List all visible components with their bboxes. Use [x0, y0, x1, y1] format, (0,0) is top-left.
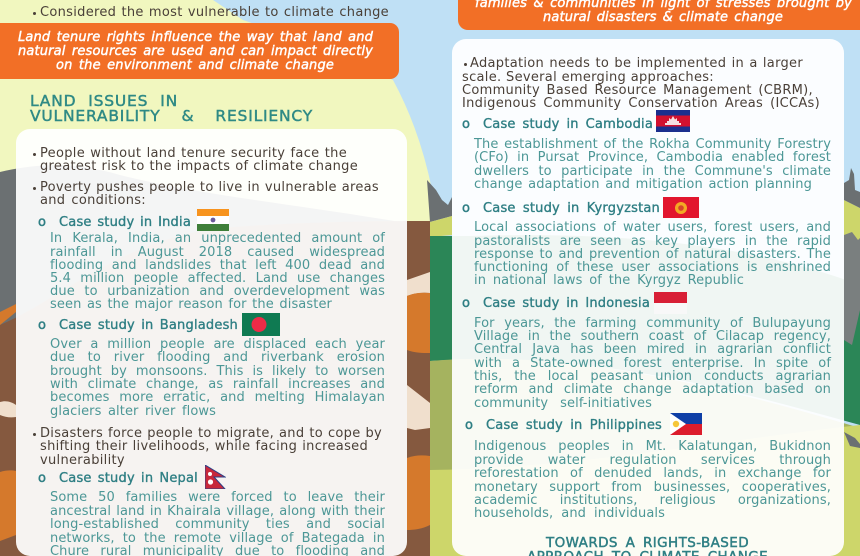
case study: Philippines: provide water regulation services through [474, 453, 831, 468]
icon: Cambodia flag [656, 110, 690, 132]
bullet: disasters [33, 426, 382, 468]
callout: families and communities: natural disasters & climate change [543, 10, 783, 25]
case study: Indonesia: this, the local peasant union conducts agrarian [474, 369, 831, 384]
case study: Bangladesh: due to river flooding and riverbank erosion [50, 350, 385, 365]
case study: Bangladesh: becomes more erratic, and melting Himalayan [50, 390, 385, 405]
case study: Philippines: academic institutions, religious organizations, [474, 493, 831, 508]
case study: Nepal: long-established community ties and social [50, 517, 385, 532]
case study: Philippines: households, and individuals [474, 506, 665, 521]
bullet: adaptation approaches: Indigenous Community Conservation Areas (ICCAs) [462, 96, 820, 111]
heading: towards a rights-based approach [527, 535, 768, 556]
case study: Nepal [38, 465, 385, 556]
case study: India: seen as the major reason for the disaster [50, 297, 332, 312]
callout: land tenure rights [0, 23, 399, 79]
case study: Kyrgyzstan: pastoralists are seen as key players in the rapid [474, 234, 831, 249]
case study: Indonesia: For years, the farming community of Bulupayung [474, 316, 831, 331]
case study: Bangladesh: o [38, 318, 46, 333]
panel: land issues card [16, 129, 407, 556]
case study: Philippines: o [465, 418, 473, 433]
case study: Bangladesh: brought by monsoons. This is likely to worsen [50, 364, 385, 379]
case study: India: o [38, 215, 46, 230]
heading: land issues [30, 92, 313, 125]
case study: Philippines: Case study in Philippines [486, 418, 662, 433]
case study: Cambodia: Case study in Cambodia [483, 117, 653, 132]
case study: Indonesia: community self-initiatives [474, 396, 652, 411]
case study: Cambodia: change adaptation and mitigation action planning [474, 177, 812, 192]
icon: India flag [197, 209, 229, 231]
case study: Indonesia: Central Java has been mired in agrarian conflict [474, 342, 831, 357]
bullet: adaptation approaches: Adaptation needs to be implemented in a larger [470, 56, 803, 71]
case study: Indonesia [462, 292, 832, 411]
case study: Nepal: ancestral land in Khairala village, along with their [50, 504, 385, 519]
bullet: tenure security: People without land tenure security face the [40, 146, 347, 161]
case study: India: flooding and landslides that left 400 dead and [50, 258, 385, 273]
case study: Kyrgyzstan: functioning of these user associations is enshrined [474, 260, 831, 275]
bullet: poverty: Poverty pushes people to live in vulnerable areas [40, 180, 379, 195]
case study: Philippines: Indigenous peoples in Mt. Kalatungan, Bukidnon [474, 439, 831, 454]
case study: Bangladesh: Over a million people are displaced each year [50, 337, 385, 352]
icon: Indonesia flag [654, 292, 687, 303]
bullet: most vulnerable: Considered the most vulnerable to climate change [40, 5, 389, 20]
bullet: disasters: vulnerability [40, 453, 125, 468]
bullet: tenure security [33, 146, 358, 174]
case study: Indonesia: Case study in Indonesia [483, 296, 650, 311]
icon: Bangladesh flag [242, 313, 280, 336]
case study: Bangladesh: glaciers alter river flows [50, 404, 216, 419]
bullet: adaptation approaches: Community Based Resource Management (CBRM), [462, 83, 813, 98]
case study: Nepal: networks, to the remote village of Bategada in [50, 531, 385, 546]
bullet: disasters: Disasters force people to migrate, and to cope by [40, 426, 382, 441]
case study: Bangladesh: Case study in Bangladesh [59, 318, 238, 333]
case study: Kyrgyzstan: o [462, 201, 470, 216]
heading: land issues: LAND ISSUES IN [30, 92, 178, 110]
panel: adaptation card [452, 39, 844, 556]
case study: Cambodia: o [462, 117, 470, 132]
heading: land issues: VULNERABILITY & RESILIENCY [30, 107, 313, 125]
case study: Kyrgyzstan: Local associations of water users, forest users, and [474, 220, 831, 235]
case study: Philippines [465, 413, 831, 521]
case study: Nepal: o [38, 471, 46, 486]
callout: land tenure rights: on the environment and climate change [56, 58, 334, 73]
case study: Cambodia: (CFo) in Pursat Province, Cambodia enabled forest [474, 150, 831, 165]
case study: Kyrgyzstan: in national laws of the Kyrgyz Republic [474, 273, 744, 288]
case study: Cambodia: The establishment of the Rokha Community Forestry [474, 137, 831, 152]
icon: Philippines flag [670, 413, 702, 435]
case study: Nepal: Case study in Nepal [59, 471, 198, 486]
case study: India: 5.4 million people affected. Land use changes [50, 271, 385, 286]
case study: Kyrgyzstan [462, 197, 831, 288]
heading: towards a rights-based approach: TOWARDS A RIGHTS-BASED [546, 535, 749, 551]
icon: Kyrgyzstan flag [663, 197, 699, 218]
bullet: adaptation approaches [462, 56, 820, 111]
bullet: adaptation approaches: scale. Several emerging approaches: [462, 70, 714, 85]
case study: Cambodia: dwellers to participate in the Commune's climate [474, 164, 831, 179]
icon: Nepal flag [205, 465, 226, 489]
case study: Philippines: monetary support from businesses, cooperatives, [474, 480, 831, 495]
bullet: tenure security: greatest risk to the impacts of climate change [40, 159, 358, 174]
case study: Cambodia [462, 110, 831, 192]
case study: India [38, 209, 386, 312]
case study: Philippines: reforestation of denuded lands, in exchange for [474, 466, 831, 481]
case study: Indonesia: o [462, 296, 470, 311]
case study: Nepal: Some 50 families were forced to leave their [50, 490, 385, 505]
case study: Bangladesh: with climate change, as rainfall increases and [50, 377, 385, 392]
callout: land tenure rights: natural resources are used and can impact directly [18, 44, 373, 59]
case study: Bangladesh [38, 313, 385, 419]
case study: India: due to urbanization and overdevelopment was [50, 284, 385, 299]
case study: India: In Kerala, India, an unprecedented amount of [50, 231, 385, 246]
callout: families and communities [458, 0, 860, 30]
case study: Indonesia: Village in the southern coast of Cilacap regency, [474, 329, 831, 344]
case study: Kyrgyzstan: Case study in Kyrgyzstan [483, 201, 660, 216]
case study: India: rainfall in August 2018 caused widespread [50, 245, 385, 260]
case study: Kyrgyzstan: response to and prevention of natural disasters. The [474, 247, 831, 262]
bullet: poverty [33, 180, 379, 208]
bullet: disasters: shifting their livelihoods, while facing increased [40, 439, 368, 454]
callout: land tenure rights: Land tenure rights influence the way that land and [18, 30, 373, 45]
case study: Indonesia: with a State-owned forest enterprise. In spite of [474, 356, 831, 371]
bullet: poverty: and conditions: [40, 193, 146, 208]
case study: India: Case study in India [59, 215, 191, 230]
case study: Indonesia: reform and climate change adaptation based on [474, 382, 831, 397]
